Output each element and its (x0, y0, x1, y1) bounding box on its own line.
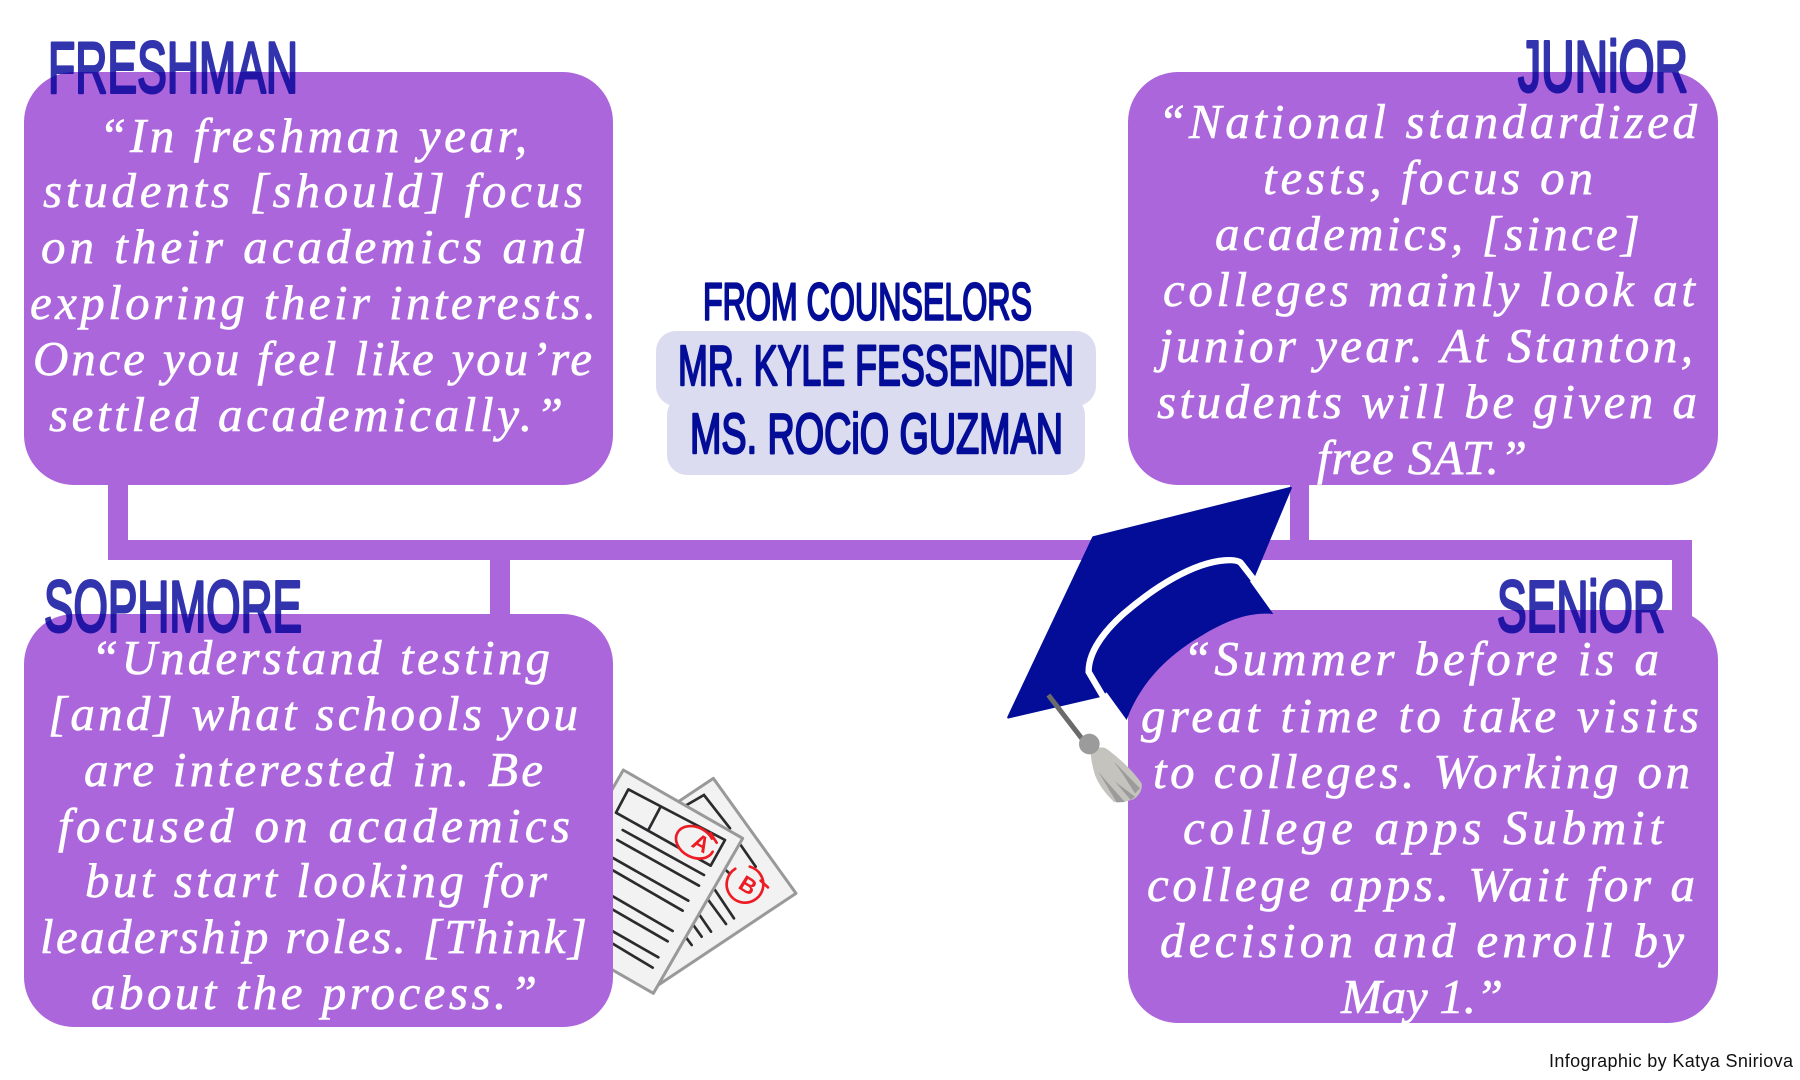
name: Rocio Guzman: MS. ROCiO GUZMAN (690, 402, 1063, 466)
quote: junior: free SAT.” (1317, 430, 1527, 485)
quote: sophomore: but start looking for (85, 853, 548, 908)
quote: senior: college apps Submit (1183, 800, 1664, 855)
panel: sophomore (24, 568, 613, 1027)
icon: graduation cap (1008, 488, 1291, 802)
quote: senior: to colleges. Working on (1153, 744, 1690, 799)
quote: freshman (30, 108, 596, 442)
quote: senior (1141, 631, 1699, 1024)
icon: graded test papers (534, 770, 796, 993)
heading: sophomore: SOPHMORE (44, 568, 302, 648)
quote: senior: “Summer before is a (1183, 631, 1659, 686)
panel: junior (1128, 28, 1718, 485)
name pill: Kyle Fessenden (656, 331, 1096, 475)
quote: junior: academics, [since] (1215, 206, 1640, 261)
quote: senior: college apps. Wait for a (1147, 857, 1695, 912)
quote: senior: decision and enroll by (1160, 913, 1684, 968)
panel: freshman (24, 28, 613, 485)
quote: sophomore: focused on academics (58, 798, 570, 853)
quote: senior: great time to take visits (1141, 688, 1699, 743)
panel: senior (1128, 568, 1718, 1024)
icon: graded test papers: A (688, 828, 714, 858)
quote: sophomore: leadership roles. [Think] (40, 909, 587, 964)
quote: freshman: students [should] focus (43, 163, 583, 218)
quote: sophomore: about the process.” (91, 965, 537, 1020)
quote: freshman: “In freshman year, (99, 108, 527, 163)
quote: junior: tests, focus on (1263, 150, 1593, 205)
icon: graded test papers: B (734, 870, 762, 901)
label: from counselors: FROM COUNSELORS (703, 274, 1032, 332)
icon: tassel (1048, 695, 1142, 802)
quote: freshman: Once you feel like you’re (33, 331, 592, 386)
quote: junior: students will be given a (1157, 374, 1697, 429)
quote: freshman: exploring their interests. (30, 275, 596, 330)
quote: sophomore: are interested in. Be (84, 742, 543, 797)
quote: sophomore: [and] what schools you (48, 686, 578, 741)
quote: junior: colleges mainly look at (1163, 262, 1696, 317)
timeline connectors (108, 480, 1692, 620)
heading: junior: JUNiOR (1518, 28, 1688, 108)
quote: sophomore: “Understand testing (91, 630, 550, 685)
quote: junior: “National standardized (1158, 94, 1698, 149)
quote: junior (1153, 94, 1698, 485)
quote: junior: junior year. At Stanton, (1153, 318, 1693, 373)
quote: freshman: on their academics and (41, 219, 584, 274)
heading: senior: SENiOR (1497, 568, 1665, 648)
quote: freshman: settled academically.” (49, 387, 563, 442)
name pill: Kyle Fessenden: MR. KYLE FESSENDEN (678, 334, 1074, 398)
credit line: Infographic by Katya Sniriova (1549, 1051, 1794, 1071)
counselor credits (656, 274, 1096, 475)
quote: sophomore (40, 630, 587, 1020)
quote: senior: May 1.” (1340, 969, 1503, 1024)
heading: freshman: FRESHMAN (48, 28, 298, 108)
